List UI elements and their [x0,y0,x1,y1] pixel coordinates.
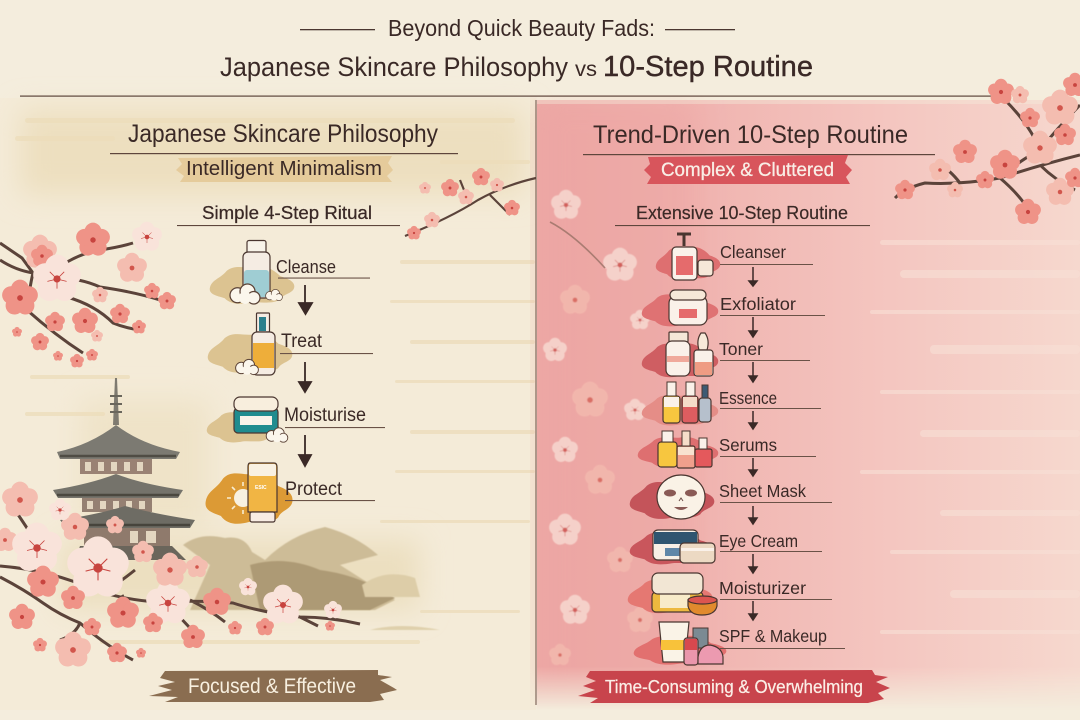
arrow [749,458,757,476]
bottom cherry branch [0,482,360,670]
arrow [749,362,757,382]
badge: Intelligent Minimalism: Intelligent Minimalism [186,158,382,180]
arrow [749,267,757,286]
left cherry branch top [0,222,177,369]
title: Japanese Skincare Philosophy [220,52,568,82]
title: Beyond Quick Beauty Fads: [388,15,655,41]
centre cherry branch [405,168,536,241]
step: Essence [642,382,821,425]
title: vs [575,58,597,81]
step: SPF and Makeup [634,622,845,665]
step: Toner: Toner [719,339,763,359]
subheading: Extensive 10-Step Routine: Extensive 10-Step Routine [636,203,848,223]
step: Exfoliator [642,290,825,326]
arrow [299,362,311,392]
arrow [749,317,757,337]
step: Essence: Essence [719,388,777,408]
badge: Time-Consuming & Overwhelming [578,670,890,703]
arrow [749,554,757,573]
title: 10-Step Routine [603,51,813,83]
step: Sheet Mask [630,475,832,519]
step: Cleanse: Cleanse [276,257,336,277]
arrow [299,435,311,466]
left panel wash [0,98,536,710]
subheading: Simple 4-Step Ritual: Simple 4-Step Ritual [202,203,372,223]
step: Exfoliator: Exfoliator [720,294,796,314]
right panel wash [537,96,1080,710]
arrow [299,285,312,314]
step: Eye Cream [630,530,822,564]
step: Eye Cream: Eye Cream [719,531,798,551]
right cherry branch [894,73,1080,227]
step: Cleanse [210,240,370,304]
step: Protect: Protect [285,479,343,500]
step: Protect: ESIC [255,485,267,491]
step: Moisturise: Moisturise [284,405,366,426]
step: Moisturizer [628,573,832,615]
arrow [749,601,757,620]
step: Serums: Serums [719,435,777,455]
step: Serums [638,431,816,468]
arrow [749,411,757,429]
heading: Trend-Driven 10-Step Routine: Trend-Driven 10-Step Routine [593,121,908,149]
step: Treat [208,313,373,375]
step: Moisturise [207,397,385,442]
badge: Time-Consuming & Overwhelming: Time-Consuming & Overwhelming [605,677,863,697]
heading: Japanese Skincare Philosophy: Japanese Skincare Philosophy [128,120,438,148]
step: Toner [642,332,810,377]
step: Protect [206,463,375,524]
step: Sheet Mask: Sheet Mask [719,481,806,501]
distant trees [183,527,440,630]
step: Cleanser [656,234,813,280]
step: SPF and Makeup: SPF & Makeup [719,626,827,646]
step: Moisturizer: Moisturizer [719,578,806,598]
step: Cleanser: Cleanser [720,242,786,262]
arrow [749,506,757,524]
badge: Complex & Cluttered: Complex & Cluttered [661,160,834,181]
badge: Complex & Cluttered [644,155,852,184]
badge: Focused & Effective [149,670,397,702]
title [20,15,1000,97]
pagoda [53,378,195,560]
step: Treat: Treat [281,331,323,352]
badge: Focused & Effective: Focused & Effective [188,675,356,698]
panel divider [536,100,537,705]
